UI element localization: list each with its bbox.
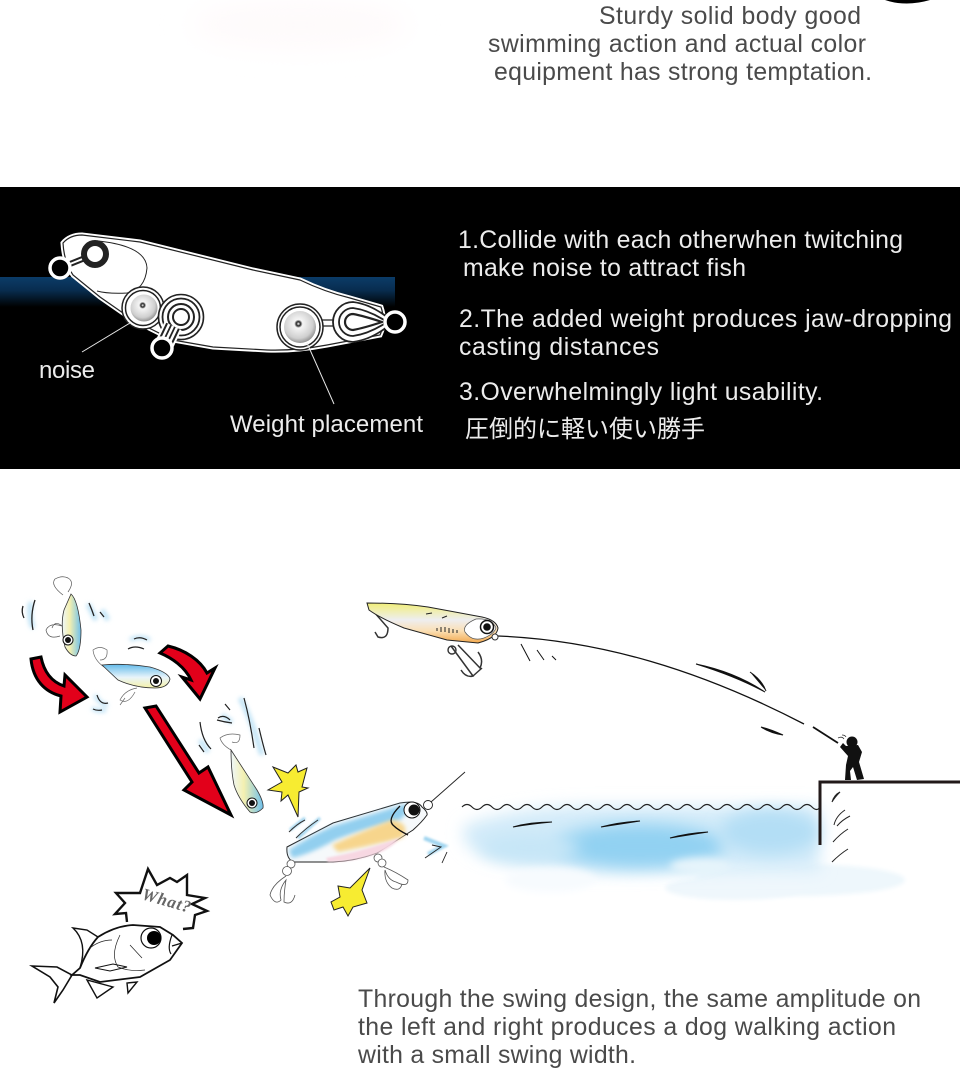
weight ball <box>277 304 342 350</box>
motion strokes <box>199 698 266 755</box>
body <box>367 603 498 643</box>
intro text: Sturdy solid body good <box>599 3 861 30</box>
hooks <box>270 854 408 903</box>
body <box>287 802 427 862</box>
body <box>231 750 263 813</box>
hooks <box>374 612 482 676</box>
tail <box>32 966 72 1003</box>
intro text: swimming action and actual color <box>488 31 866 58</box>
water <box>463 806 905 900</box>
gill <box>391 806 408 835</box>
eye <box>63 635 73 645</box>
noise ball <box>122 287 164 329</box>
gill lines <box>90 935 145 971</box>
burst label: What? <box>140 885 193 917</box>
hooks <box>46 577 72 637</box>
body <box>102 664 170 688</box>
motion strokes <box>22 600 104 630</box>
eye <box>141 928 161 948</box>
angler silhouette <box>838 735 864 780</box>
description text: Through the swing design, the same amplitude on <box>358 986 921 1013</box>
motion ink <box>289 820 318 838</box>
intro text <box>488 3 872 86</box>
intro text: equipment has strong temptation. <box>494 59 872 86</box>
eye <box>480 620 494 634</box>
arrow 2 <box>160 646 215 699</box>
impact star top <box>268 765 308 817</box>
hooks <box>220 734 240 750</box>
blue back <box>289 805 414 858</box>
faint smudge top left <box>190 1 410 49</box>
feature list: 3.Overwhelmingly light usability. <box>459 379 823 406</box>
body <box>62 594 81 656</box>
arrow 3 <box>145 706 231 815</box>
orange band <box>332 820 405 852</box>
arrow 1 <box>31 657 87 712</box>
belly fins <box>87 980 137 998</box>
feature list: 2.The added weight produces jaw-dropping <box>459 306 952 333</box>
panel background <box>0 187 960 469</box>
nose ring <box>492 634 498 640</box>
impact star bottom <box>331 868 370 916</box>
swim lure B <box>92 638 170 711</box>
feature list: 1.Collide with each otherwhen twitching <box>458 227 903 254</box>
icon: black arc top right <box>885 0 930 4</box>
hooks <box>93 648 137 705</box>
nose ring and line <box>424 772 465 810</box>
surprised fish <box>32 869 207 1003</box>
description text: the left and right produces a dog walking action <box>358 1014 896 1041</box>
large lure <box>270 772 465 903</box>
wave line <box>462 804 820 810</box>
hook ring <box>448 646 456 654</box>
feature list: casting distances <box>459 334 659 361</box>
pier <box>820 782 960 862</box>
tail wire <box>333 302 387 342</box>
motion strokes <box>93 638 147 710</box>
dorsal fin <box>73 928 98 968</box>
feature list: 圧倒的に軽い使い勝手 <box>465 416 705 443</box>
swim lure A <box>22 577 108 656</box>
motion strokes around rod <box>521 644 783 735</box>
flying yellow lure <box>367 603 498 676</box>
motion strokes tail <box>290 818 320 838</box>
description text <box>357 986 921 1069</box>
head patch <box>464 619 496 639</box>
belly ring <box>152 338 172 358</box>
splash <box>92 638 150 711</box>
diagram labels <box>39 357 423 438</box>
swim lure C <box>199 698 266 813</box>
head wire and eye <box>50 243 106 278</box>
mouth <box>169 935 182 954</box>
leader lines <box>82 323 334 404</box>
feature list <box>458 227 952 443</box>
water ripple strokes <box>513 821 708 838</box>
speech burst <box>115 869 207 929</box>
eye <box>404 802 420 818</box>
belly hook wire <box>158 294 204 347</box>
fishing rod and line <box>498 636 838 743</box>
pink belly <box>326 838 400 862</box>
motion marks at nose <box>424 838 447 863</box>
red arrows <box>31 646 231 815</box>
diagram labels: Weight placement <box>230 411 423 438</box>
panel: internal structure <box>0 187 960 469</box>
diagram labels: noise <box>39 357 95 384</box>
description text: with a small swing width. <box>357 1042 636 1069</box>
feature list: make noise to attract fish <box>463 255 746 282</box>
blue band <box>0 277 395 307</box>
eye <box>247 798 257 808</box>
eye <box>150 676 162 686</box>
body <box>72 925 182 982</box>
tail ring <box>385 312 405 332</box>
splash <box>200 698 262 755</box>
lure cutaway diagram <box>50 235 405 404</box>
gill marks <box>426 613 457 633</box>
splash <box>30 602 108 628</box>
pectoral fin <box>95 964 127 971</box>
